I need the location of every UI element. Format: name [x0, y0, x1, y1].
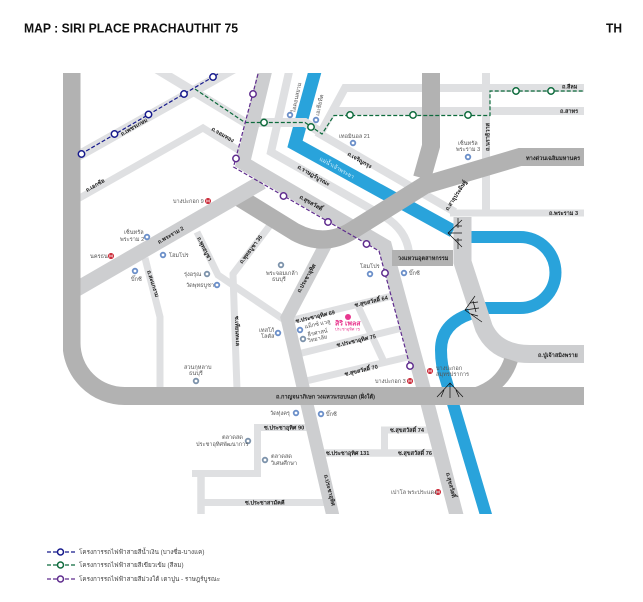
- major roads below expressway: [243, 63, 590, 525]
- road labels: ซ.สุขสวัสดิ์ 74: [390, 425, 425, 434]
- poi: market prachauthit: [196, 434, 250, 448]
- project marker: siri place: สิริ เพลส: [334, 320, 361, 328]
- poi: market wisetsuksa: [263, 453, 297, 467]
- road labels: ทางด่วนเฉลิมมหานคร: [526, 155, 580, 162]
- poi: homepro rama 2: โฮมโปร: [169, 251, 189, 259]
- road labels: ถ.ราษฎร์บูรณะ: [296, 163, 331, 189]
- road labels: แม่น้ำเจ้าพระยา: [318, 155, 356, 181]
- poi: big c: [402, 269, 420, 277]
- poi: homepro: [360, 262, 380, 276]
- poi: tesco lotus: [259, 326, 280, 340]
- poi: homepro: โฮมโปร: [360, 262, 380, 270]
- road labels: ถ.ประชาอุทิศ: [322, 474, 338, 507]
- poi: bangpakok samut prakan hospital: บางปะกอก: [436, 365, 462, 372]
- poi: max value: แม็กซ์ แวลู: [304, 317, 331, 330]
- road labels: ซ.เทียนทะเล: [233, 316, 241, 347]
- legend item: purple line: โครงการรถไฟฟ้าสายสีม่วงใต้ เตาปูน - ราษฎร์บูรณะ: [79, 575, 220, 583]
- poi: central rama 2: [120, 228, 149, 243]
- poi: central rama 2: พระราม 2: [120, 237, 144, 243]
- road labels: ถ.นราธิวาส: [484, 122, 492, 151]
- project marker: siri place: [334, 314, 361, 332]
- poi: wat thung khru: [270, 410, 298, 417]
- icon: bridge crossing bottom: [437, 383, 463, 398]
- road labels: ถ.พุทธบูชา: [194, 236, 213, 263]
- minor roads: [76, 63, 590, 525]
- icon: bridge crossing top: [448, 218, 462, 249]
- poi: icon-siam: [288, 82, 303, 117]
- road labels: วงแหวนอุตสาหกรรม: [398, 255, 449, 262]
- road: Rama 2: [70, 182, 262, 293]
- project marker: siri place: ประชาอุทิศ 75: [335, 326, 361, 332]
- road labels: ถ.สะแกงาม: [145, 269, 160, 298]
- legend item: blue line: โครงการรถไฟฟ้าสายสีน้ำเงิน (บางซื่อ-บางแค): [79, 547, 204, 556]
- road labels: ซ.ประชาสามัคคี: [245, 498, 285, 506]
- poi: suan dhonburi: [184, 364, 212, 383]
- poi: central rama 2: เซ็นทรัล: [124, 228, 144, 236]
- poi: homepro rama 2: [161, 251, 189, 259]
- legend item: green line: [47, 561, 184, 569]
- poi: market prachauthit: ประชาอุทิศพัฒนาการ: [196, 441, 248, 448]
- poi: asiatique: เอเชียทีค: [314, 93, 326, 116]
- transit line: green: [195, 88, 584, 134]
- poi: big c south: บิ๊กซี: [326, 410, 337, 418]
- legend item: green line: โครงการรถไฟฟ้าสายสีเขียวเข้ม (สีลม): [79, 561, 184, 569]
- title: MAP : SIRI PLACE PRACHAUTHIT 75: [24, 22, 238, 36]
- road labels: ถ.เจริญกรุง: [346, 151, 373, 170]
- road labels: ถ.สุขสวัสดิ์: [444, 471, 459, 500]
- poi: nakornthon hospital: นครธน: [90, 253, 108, 260]
- poi: terminal 21: เทอมินอล 21: [339, 133, 370, 140]
- transit line: blue: [78, 74, 218, 157]
- poi: bangpakok 3 hospital: บางปะกอก 3: [375, 378, 406, 385]
- road over river: [155, 73, 320, 134]
- road labels: ถ.จอมทอง: [210, 126, 235, 144]
- poi: central rama 3: พระราม 3: [456, 147, 480, 153]
- language label: TH: [606, 22, 622, 36]
- poi: kmutt: พระจอมเกล้า: [266, 270, 298, 277]
- road labels: ซ.สุขสวัสดิ์ 64: [353, 292, 389, 309]
- legend item: blue line: [47, 547, 204, 556]
- road labels: ถ.เพชรเกษม: [120, 117, 149, 138]
- poi: suan dhonburi: สวนกุหลาบ: [184, 364, 212, 371]
- poi: paolo phrapradaeng hospital: [391, 488, 441, 496]
- road labels: ถ.สาธุประดิษฐ์: [443, 178, 469, 212]
- poi: asiatique: [314, 93, 326, 122]
- road labels: ถ.สุขสวัสดิ์: [298, 192, 326, 213]
- road labels: ถ.พระราม 2: [156, 225, 185, 246]
- poi: school: ธีรศาสน์: [306, 326, 328, 339]
- road labels: ถ.ประชาอุทิศ: [295, 262, 318, 294]
- poi: kmutt: [266, 263, 298, 283]
- poi: tesco lotus: เทสโก้: [259, 326, 274, 334]
- road labels: ซ.ประชาอุทิศ 131: [326, 449, 369, 457]
- poi: central rama 3: [456, 139, 480, 159]
- road labels: ซ.สุขสวัสดิ์ 76: [398, 448, 432, 457]
- poi: terminal 21: [339, 133, 370, 145]
- poi: nakornthon hospital: [90, 253, 114, 260]
- poi: market prachauthit: ตลาดสด: [222, 434, 243, 441]
- poi: big c: บิ๊กซี: [409, 269, 420, 277]
- road labels: ถ.พระราม 3: [549, 210, 578, 217]
- poi: bangpakok samut prakan hospital: สมุทรปราการ: [436, 371, 469, 378]
- poi: bangpakok 9 hospital: บางปะกอก 9: [173, 198, 204, 205]
- poi: tesco lotus: โลตัส: [261, 332, 275, 340]
- road labels: ถ.เอกชัย: [84, 177, 106, 194]
- icon: bridge crossing middle: [465, 296, 482, 322]
- poi: school: [301, 326, 328, 345]
- poi: bangpakok 3 hospital: [375, 378, 413, 385]
- transit line: purple: [233, 74, 413, 369]
- road labels: ซ.สุขสวัสดิ์ 70: [343, 362, 379, 378]
- poi: market wisetsuksa: วิเศษศึกษา: [270, 460, 297, 467]
- road labels: ถ.ปู่เจ้าสมิงพราย: [538, 351, 578, 360]
- road labels: ถ.สาทร: [560, 108, 578, 115]
- poi: bangpakok 9 hospital: [173, 198, 211, 205]
- river: Chao Phraya: [295, 64, 555, 525]
- poi: big c rama 2: [131, 269, 142, 283]
- poi: kmutt: ธนบุรี: [272, 276, 286, 283]
- road labels: ซ.ประชาอุทิศ 69: [295, 308, 336, 325]
- road labels: [84, 84, 580, 507]
- expressways: [235, 65, 590, 396]
- poi: wat phutthabucha: วัดพุทธบูชา: [186, 282, 214, 289]
- poi: rungaroon: [184, 272, 209, 278]
- poi: icon-siam: ไอคอนสยาม: [290, 82, 303, 114]
- road labels: ซ.ประชาอุทิศ 90: [264, 424, 304, 432]
- poi: bangpakok samut prakan hospital: [427, 365, 469, 378]
- poi: central rama 3: เซ็นทรัล: [458, 139, 478, 147]
- poi: big c rama 2: บิ๊กซี: [131, 275, 142, 283]
- poi: big c south: [319, 410, 337, 418]
- poi: market wisetsuksa: ตลาดสด: [271, 453, 292, 460]
- map: road network: [70, 63, 590, 525]
- poi: suan dhonburi: ธนบุรี: [189, 370, 203, 377]
- poi: rungaroon: รุ่งอรุณ: [184, 272, 201, 278]
- poi: wat thung khru: วัดทุ่งครุ: [270, 410, 290, 417]
- expressway: outer ring: [72, 65, 590, 396]
- road labels: ซ.ประชาอุทิศ 75: [336, 332, 377, 349]
- poi: paolo phrapradaeng hospital: เปาโล พระประแดง: [391, 488, 437, 496]
- road labels: ถ.กาญจนาภิเษก วงแหวนรอบนอก (ฝั่งใต้): [276, 392, 375, 400]
- poi: school: วิทยาลัย: [306, 333, 328, 345]
- road labels: ถ.สีลม: [562, 84, 578, 90]
- poi: max value: [298, 317, 331, 332]
- road labels: ถ.พุทธบูชา 36: [238, 234, 265, 266]
- legend: [47, 547, 220, 583]
